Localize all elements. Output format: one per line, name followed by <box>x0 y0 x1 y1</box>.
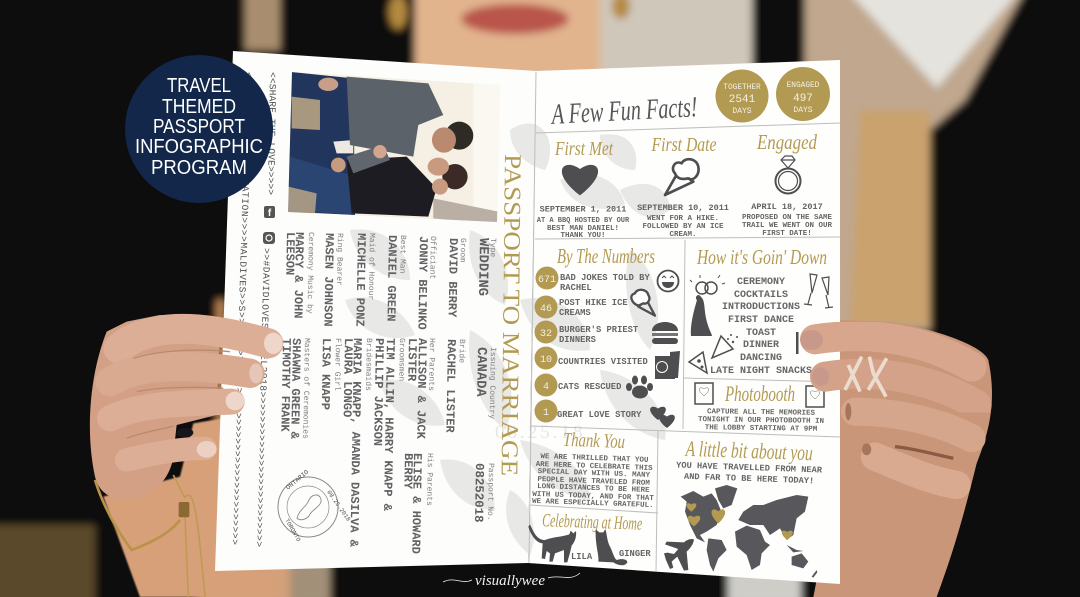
badge: together days: DAYS <box>732 107 752 116</box>
badge: engaged days: ENGAGED <box>787 82 820 90</box>
fact: first met: First Met <box>554 138 613 160</box>
panel: thank you: PEOPLE HAVE TRAVELED FROM <box>537 476 650 488</box>
panel: photobooth: THE LOBBY STARTING AT 9PM <box>705 424 818 434</box>
stacked rings <box>845 357 887 397</box>
visuallywee signature: visuallywee <box>475 573 545 589</box>
fact: engaged <box>742 130 833 238</box>
panel: by the numbers: RACHEL <box>560 283 592 293</box>
hashtag strip: >>#DAVIDLOVESRACHEL2018>>>>>>>>>>>>>>>>>>>>>>>>> <box>253 248 272 547</box>
icon: polaroid left <box>695 383 713 404</box>
panel: how it's goin' down: TOAST <box>746 328 776 339</box>
passport details: DANIEL GREEN <box>383 235 399 322</box>
icon: bride and groom silhouette <box>691 295 712 336</box>
passport details: Type <box>488 238 497 258</box>
passport details: MARIA KNAPP, AMANDA DASILVA & <box>346 338 364 548</box>
stamp: toronto ontario: ONTARIO <box>285 469 310 492</box>
passport details: TIMOTHY FRANK <box>277 338 293 433</box>
fact: engaged: Engaged <box>756 130 817 154</box>
fact: first date: WENT FOR A HIKE. <box>647 215 719 223</box>
passport details: RACHEL LISTER <box>442 339 458 434</box>
icon: laughing face <box>658 270 678 292</box>
panel: by the numbers: 10 <box>540 355 552 366</box>
panel: a little bit about you: A little bit about you <box>684 436 813 465</box>
badge: engaged days: DAYS <box>793 106 813 115</box>
passport details: LISTER <box>404 338 419 382</box>
panel: by the numbers: COUNTRIES VISITED <box>558 357 648 367</box>
watermark date: 08.25.18 <box>495 422 586 443</box>
icon: facebook: f <box>268 208 272 219</box>
badge: engaged days <box>776 67 830 121</box>
fact: first met: AT A BBQ HOSTED BY OUR <box>537 217 630 225</box>
badge title text: PASSPORT <box>153 116 245 138</box>
passport details: Groomsmen <box>396 338 406 382</box>
watermark leaf wreath <box>345 124 670 555</box>
panel: by the numbers: GREAT LOVE STORY <box>557 410 642 420</box>
heading: a few fun facts: A Few Fun Facts! <box>549 91 698 131</box>
icon: wedding rings <box>690 275 725 294</box>
badge title text: TRAVEL <box>167 75 231 97</box>
panel: thank you <box>532 428 657 510</box>
fact: engaged: APRIL 18, 2017 <box>751 202 823 212</box>
fact: engaged: FIRST DATE! <box>762 230 812 238</box>
panel: how it's goin' down <box>689 245 833 377</box>
passport details: Ring Bearer <box>334 233 344 286</box>
passport details: ELISE & HOWARD <box>408 453 424 554</box>
gold location hearts <box>686 503 793 540</box>
icon: burger <box>652 322 678 344</box>
stamp: toronto ontario <box>278 469 352 543</box>
passport details: DAVID BERRY <box>445 238 460 318</box>
passport details: Masters of Ceremonies <box>300 338 311 439</box>
fact: first date <box>637 134 729 239</box>
passport details: Bridesmaids <box>363 338 373 391</box>
fact: first date: SEPTEMBER 10, 2011 <box>637 203 729 213</box>
panel: by the numbers: CREAMS <box>559 308 591 318</box>
panel: how it's goin' down: CEREMONY <box>737 277 785 288</box>
panel: how it's goin' down: LATE NIGHT SNACKS <box>710 366 812 377</box>
panel: thank you: WE ARE THRILLED THAT YOU <box>540 453 649 465</box>
icon: party popper <box>712 334 738 358</box>
badge: together days <box>716 70 768 122</box>
passport details: WEDDING <box>474 238 490 296</box>
passport details: Her Parents <box>426 338 436 391</box>
panel: photobooth: Photobooth <box>724 381 795 406</box>
passport details: TIM ALLIN, HARRY KNAPP & <box>380 338 397 512</box>
panel: how it's goin' down: DINNER <box>743 340 779 351</box>
passport details <box>277 232 497 554</box>
badge title text: INFOGRAPHIC <box>135 136 263 158</box>
left arm behind the page <box>103 417 273 597</box>
panel: how it's goin' down: INTRODUCTIONS <box>722 302 800 313</box>
icon: facebook <box>264 206 275 219</box>
panel: how it's goin' down: DANCING <box>740 353 782 364</box>
panel: by the numbers: BURGER'S PRIEST <box>559 325 639 335</box>
passport details: PHILLIP JACKSON <box>370 338 386 446</box>
panel: by the numbers: DINNERS <box>559 335 596 345</box>
panel: by the numbers: POST HIKE ICE <box>559 298 628 308</box>
panel: by the numbers <box>534 244 680 428</box>
fact: first date: FOLLOWED BY AN ICE <box>642 223 724 231</box>
passport details: LEESON <box>282 232 297 275</box>
fact: first date: CREAM. <box>669 231 697 239</box>
passport details: Maid of Honour <box>366 233 376 301</box>
passport details: CANADA <box>472 347 488 398</box>
panel: by the numbers: 32 <box>540 329 552 340</box>
icon: passport and tickets <box>655 351 680 379</box>
icon: champagne flutes <box>804 274 833 308</box>
panel: photobooth: CAPTURE ALL THE MEMORIES <box>707 408 816 418</box>
fact: engaged: PROPOSED ON THE SAME <box>742 214 833 222</box>
passport details: LISA KNAPP <box>318 338 333 410</box>
icon: cat lila <box>528 524 576 562</box>
share the love strip: <<SHARE THE LOVE>>>>> <box>265 72 278 195</box>
panel: a little bit about you <box>664 436 823 578</box>
panel: by the numbers: 1 <box>543 408 549 419</box>
panel: thank you: WITH US TODAY, AND FOR THAT <box>532 491 654 503</box>
passport details: Groom <box>458 238 467 262</box>
right hand back behind the page <box>813 320 992 597</box>
badge: engaged days: 497 <box>793 93 813 105</box>
right hand fingers over the page <box>800 330 977 405</box>
passport details: ALLISON & JACK <box>413 338 429 440</box>
panel: celebrating at home: LILA <box>571 552 593 562</box>
panel: thank you: LONG DISTANCES TO BE HERE <box>537 483 650 495</box>
visuallywee signature <box>443 573 580 589</box>
passport details: 08252018 <box>471 463 486 523</box>
passport details: Bride <box>457 339 466 363</box>
panel: how it's goin' down: COCKTAILS <box>734 290 788 301</box>
badge: together days: TOGETHER <box>723 84 761 92</box>
left hand <box>90 315 283 597</box>
passport details: MICHELLE PONZ <box>352 233 368 327</box>
navy badge <box>125 55 273 203</box>
panel: thank you: ARE HERE TO CELEBRATE THIS <box>535 461 653 473</box>
badge: together days: 2541 <box>729 94 756 106</box>
fact: first met: SEPTEMBER 1, 2011 <box>540 204 626 214</box>
panel: celebrating at home: GINGER <box>619 549 651 559</box>
panel: photobooth: TONIGHT IN OUR PHOTOBOOTH IN <box>698 416 824 426</box>
panel: by the numbers: 671 <box>538 275 556 286</box>
panel: how it's goin' down: How it's Goin' Down <box>696 245 827 269</box>
panel: by the numbers: By The Numbers <box>557 244 655 268</box>
fact: engaged: TRAIL WE WENT ON OUR <box>742 222 833 230</box>
panel: thank you: SPECIAL DAY WITH US. MANY <box>537 468 651 480</box>
destination strip: <<<<<<<<<<<<DESTINATION>>>>MALDIVES>>S>>>>>>>>>>>>>>>>>>>>>>>>>>>>>>>>>>>>> <box>229 72 254 545</box>
badge title text: PROGRAM <box>151 157 247 179</box>
passport details: MASEN JOHNSON <box>320 233 336 327</box>
panel: by the numbers: BAD JOKES TOLD BY <box>560 273 650 283</box>
passport details: Passport No. <box>485 463 495 521</box>
passport details: SHAWNA GREEN & <box>287 338 303 440</box>
panel: celebrating at home: Celebrating at Home <box>542 510 643 535</box>
icon: paw print <box>626 376 653 398</box>
fact: first met <box>537 138 630 240</box>
icon: ice cream outline <box>631 290 655 316</box>
stamp: toronto ontario: 08.25.2018 <box>325 489 352 523</box>
passport details: JONNY BELINKO <box>414 236 430 330</box>
panel: celebrating at home <box>528 510 651 565</box>
icon: fork <box>796 332 798 354</box>
panel: by the numbers: 4 <box>543 382 549 393</box>
passport details: LAURA LONGO <box>340 338 355 417</box>
panel: a little bit about you: AND FAR TO BE HERE TODAY! <box>684 472 814 486</box>
icon: diamond ring <box>776 156 800 194</box>
world map <box>681 485 817 578</box>
passport details: Ceremony Music by <box>305 232 315 314</box>
badge title text: THEMED <box>162 96 236 118</box>
fact: first met: BEST MAN DANIEL! <box>547 225 619 233</box>
icon: cat ginger <box>596 529 627 565</box>
icon: airplane <box>664 539 694 571</box>
badge title text <box>135 75 263 179</box>
passport details: His Parents <box>424 453 434 506</box>
icon: two hearts <box>650 407 675 428</box>
passport details: Issuing Country <box>487 347 497 419</box>
passport details: MARCY & JOHN <box>290 232 306 319</box>
passport details: Officiant <box>427 236 437 279</box>
passport details: Best Man <box>397 235 407 274</box>
panel: how it's goin' down: FIRST DANCE <box>728 315 794 326</box>
panel: by the numbers: 46 <box>540 304 552 315</box>
passport details: Flower Girl <box>332 338 342 391</box>
icon: instagram <box>263 232 275 244</box>
panel: a little bit about you: YOU HAVE TRAVELLED FROM NEAR <box>676 460 823 476</box>
gold bracelet <box>95 475 205 597</box>
icon: polaroid right <box>806 386 824 407</box>
fact: first date: First Date <box>651 134 717 156</box>
stamp: toronto ontario: TORONTO <box>283 518 302 543</box>
right page of passport program <box>528 60 840 584</box>
icon: pizza slice <box>689 352 707 373</box>
icon: heart <box>562 165 598 195</box>
panel: by the numbers: CATS RESCUED <box>558 382 621 392</box>
panel: thank you: Thank You <box>563 429 625 453</box>
passport to marriage vertical title: PASSPORT TO MARRIAGE <box>496 154 525 476</box>
passport details: BERRY <box>400 453 415 490</box>
panel: photobooth <box>695 381 824 434</box>
right page divider lines <box>529 72 840 571</box>
engagement photo of the couple <box>285 68 505 228</box>
icon: ice cream <box>665 159 699 195</box>
fact: first met: THANK YOU! <box>560 232 606 240</box>
left page of passport program <box>215 51 536 571</box>
panel: thank you: WE ARE ESPECIALLY GRATEFUL. <box>532 498 654 510</box>
